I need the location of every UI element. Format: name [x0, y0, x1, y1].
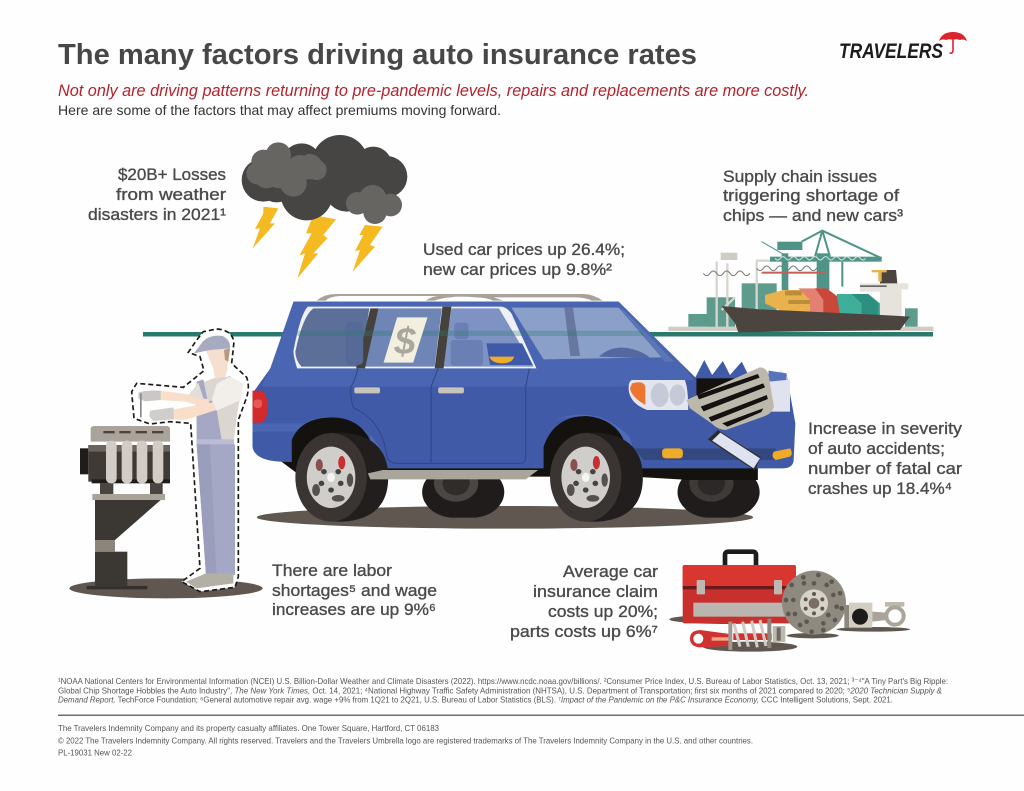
pillars and window frames	[293, 307, 536, 368]
illustration: damaged blue SUV	[252, 294, 795, 529]
title: The many factors driving auto insurance rates	[58, 39, 697, 71]
callout: weather losses: disasters in 2021¹	[88, 205, 226, 224]
callout: claim costs: Average car	[563, 562, 658, 581]
logo: Travelers: TRAVELERS	[839, 40, 943, 63]
illustration: toolbox and car parts	[669, 552, 910, 652]
brake disc	[782, 571, 846, 635]
subtitle: red italic: Not only are driving patterns returning to pre-pandemic levels, repairs and replacements are more costly.	[58, 82, 809, 100]
containers	[765, 290, 810, 317]
callout: weather losses	[88, 165, 226, 224]
callout: accident severity	[808, 419, 963, 498]
callout: labor shortages: increases are up 9%⁶	[272, 600, 436, 619]
front bumper strip	[635, 448, 776, 460]
front-side wheel	[550, 433, 643, 522]
worker figure	[138, 336, 243, 588]
amber markers	[662, 448, 792, 460]
piston and connecting rod	[844, 602, 904, 628]
floor shadow	[69, 578, 263, 598]
price sticker	[384, 317, 427, 363]
superstructure	[860, 283, 908, 317]
side step	[368, 470, 538, 479]
illustration: mechanic and engine	[69, 329, 263, 598]
legal text: The Travelers Indemnity Company and its property casualty affiliates. One Tower Square, Hartford, CT 06183	[58, 723, 439, 733]
toolbox	[683, 552, 796, 623]
rear-side wheel	[295, 433, 388, 522]
footnotes: ¹NOAA National Centers for Environmental Information (NCEI) U.S. Billion-Dollar Weather and Climate Disasters (2022). https://www.ncdc.noaa.gov/billions/. ²Consumer Price Index, U.S. Bureau of Labor Statistics, Oct. 13, 2021; ³⁻⁴"A Tiny Part's Big Ripple:	[58, 676, 948, 686]
wheel arches	[299, 417, 385, 463]
callout: labor shortages: shortages⁵ and wage	[272, 581, 437, 600]
callout: weather losses: from weather	[116, 185, 226, 204]
footnotes: Global Chip Shortage Hobbles the Auto Industry", The New York Times, Oct. 14, 2021; ⁴National Highway Traffic Safety Administration (NHTSA), U.S. Department of Transportation; first six months of 2021 compared to 2020; ⁵2020 Technician Supply &	[58, 686, 942, 696]
green line seen through the glass	[297, 331, 644, 336]
subtitle: intro line: Here are some of the factors that may affect premiums moving forward.	[58, 102, 501, 118]
callout: car prices: Used car prices up 26.4%;	[423, 240, 625, 259]
shock absorber	[690, 619, 785, 650]
illustration: container ship and cranes	[668, 231, 933, 332]
callout: accident severity: of auto accidents;	[808, 439, 945, 458]
engine stand	[87, 483, 165, 589]
footnotes	[58, 676, 948, 704]
cranes	[717, 261, 770, 327]
footnotes: Demand Report, TechForce Foundation; ⁶General automotive repair avg. wage +9% from 1Q21 to 2Q21, U.S. Bureau of Labor Statistics (BLS). ⁷Impact of the Pandemic on the P&C Insurance Economy, CCC Intelligent Solutions, Sept. 2021.	[58, 694, 893, 704]
callout: supply chain: chips — and new cars³	[723, 206, 903, 225]
dashed cut-out outline	[132, 329, 248, 592]
door handles	[354, 387, 464, 393]
crumpled hood	[695, 360, 756, 380]
callout: claim costs: costs up 20%;	[548, 602, 658, 621]
callout: accident severity: Increase in severity	[808, 419, 963, 438]
callout: claim costs: insurance claim	[533, 582, 658, 601]
callout: supply chain: triggering shortage of	[723, 186, 899, 205]
callout: supply chain: Supply chain issues	[723, 167, 877, 186]
body	[252, 302, 795, 468]
roof rack	[317, 294, 602, 301]
callout: accident severity: crashes up 18.4%⁴	[808, 479, 952, 498]
engine	[80, 426, 170, 483]
legal text	[58, 723, 753, 758]
interior details	[599, 348, 651, 358]
doors	[351, 368, 529, 463]
icon: storm cloud with lightning	[242, 135, 407, 278]
horizon line	[143, 332, 933, 336]
underbody	[279, 460, 758, 480]
ground shadow	[257, 506, 753, 529]
rear tires	[422, 465, 760, 518]
callout: claim costs: parts costs up 6%⁷	[510, 622, 658, 641]
callout: car prices	[423, 240, 625, 279]
callout: weather losses: $20B+ Losses	[118, 165, 226, 184]
callout: labor shortages: There are labor	[272, 561, 392, 580]
icon: dollar sign on sticker: $	[393, 321, 416, 363]
legal text: PL-19031 New 02-22	[58, 748, 132, 758]
callout: accident severity: number of fatal car	[808, 459, 962, 478]
windshield	[511, 308, 663, 359]
legal text: © 2022 The Travelers Indemnity Company. All rights reserved. Travelers and the Travelers Umbrella logo are registered trademarks of The Travelers Indemnity Company in the U.S. and other countries.	[58, 736, 753, 746]
callout: labor shortages	[272, 561, 437, 619]
headlight	[629, 380, 688, 410]
hull	[722, 306, 910, 332]
detached bumper plate	[708, 430, 761, 471]
callout: supply chain	[723, 167, 903, 225]
shadows	[669, 615, 910, 652]
callout: car prices: new car prices up 9.8%²	[423, 260, 612, 279]
bent grille	[686, 367, 774, 430]
callout: claim costs	[510, 562, 658, 641]
tail light	[252, 391, 267, 423]
